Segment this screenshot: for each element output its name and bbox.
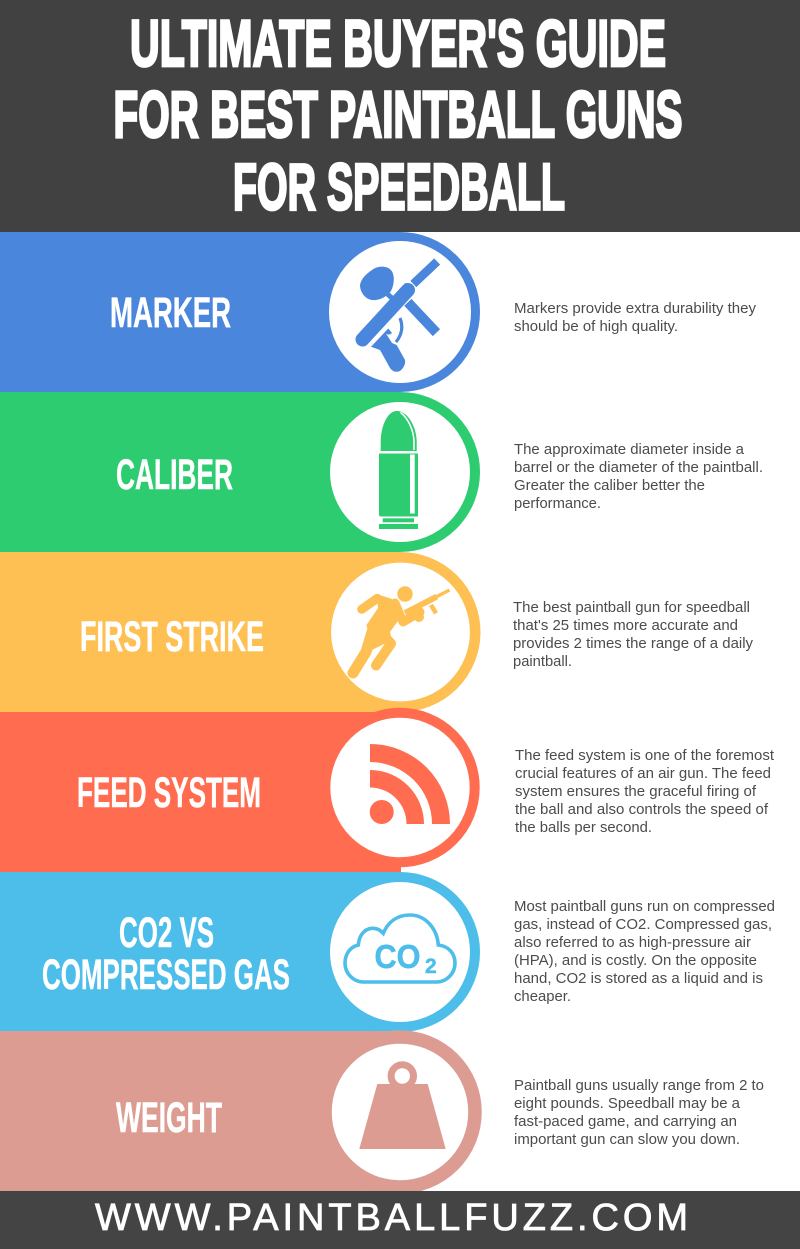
marker description xyxy=(514,301,757,335)
icon: paintball marker xyxy=(360,264,434,372)
first strike description: The best paintball gun for speedball xyxy=(513,600,750,616)
caliber description: Greater the caliber better the xyxy=(514,478,705,494)
icon: weight xyxy=(359,1065,446,1149)
CO2 description: gas, instead of CO2. Compressed gas, xyxy=(514,917,772,933)
caliber heading: CALIBER xyxy=(116,452,233,499)
first strike description xyxy=(513,600,754,670)
first strike colour bar xyxy=(0,552,400,712)
CO2 heading xyxy=(42,910,290,999)
marker heading: MARKER xyxy=(110,290,231,337)
weight description: fast-paced game, and carrying an xyxy=(514,1114,737,1130)
first strike icon ring xyxy=(326,557,475,707)
title xyxy=(114,6,682,224)
weight heading: WEIGHT xyxy=(116,1095,222,1142)
caliber description: The approximate diameter inside a xyxy=(514,442,745,458)
feed system description: crucial features of an air gun. The feed xyxy=(515,766,771,782)
panel: caliber xyxy=(0,392,763,552)
panel: marker xyxy=(0,232,757,392)
weight description: Paintball guns usually range from 2 to xyxy=(514,1078,764,1094)
first strike description: that's 25 times more accurate and xyxy=(513,618,738,634)
feed system description: the ball and also controls the speed of xyxy=(515,802,769,818)
feed system description: system ensures the graceful firing of xyxy=(515,784,757,800)
feed system heading: FEED SYSTEM xyxy=(77,770,261,817)
feed system icon ring xyxy=(325,713,475,862)
caliber description: barrel or the diameter of the paintball. xyxy=(514,460,763,476)
panel: feed system xyxy=(0,712,774,872)
CO2 description: Most paintball guns run on compressed xyxy=(514,899,775,915)
weight description: eight pounds. Speedball may be a xyxy=(514,1096,741,1112)
footer website address: WWW.PAINTBALLFUZZ.COM xyxy=(95,1197,688,1239)
icon: running paintball player xyxy=(353,586,450,673)
panel: CO2 vs compressed gas xyxy=(0,872,775,1031)
feed system description xyxy=(515,748,774,836)
CO2 description: (HPA), and is costly. On the opposite xyxy=(514,953,757,969)
title background xyxy=(0,0,800,232)
caliber description xyxy=(514,442,763,512)
CO2 heading: COMPRESSED GAS xyxy=(42,952,290,999)
marker description: should be of high quality. xyxy=(514,319,678,335)
feed system colour bar xyxy=(0,712,401,872)
weight colour bar xyxy=(0,1031,400,1191)
feed system description: The feed system is one of the foremost xyxy=(515,748,774,764)
panel: weight xyxy=(0,1031,764,1191)
title banner xyxy=(0,0,800,232)
caliber description: performance. xyxy=(514,496,601,512)
marker colour bar xyxy=(0,232,400,392)
marker icon ring xyxy=(324,236,476,388)
icon: feed signal xyxy=(370,744,450,824)
CO2 description: also referred to as high-pressure air xyxy=(514,935,751,951)
panel: first strike xyxy=(0,552,754,712)
CO2 description: cheaper. xyxy=(514,989,571,1005)
icon: CO2 cloud: 2 xyxy=(425,955,437,978)
CO2 description xyxy=(514,899,775,1005)
icon: CO2 cloud: CO xyxy=(374,938,420,975)
weight icon ring xyxy=(325,1037,475,1187)
footer background xyxy=(0,1191,800,1249)
first strike heading: FIRST STRIKE xyxy=(80,614,264,661)
CO2 colour bar xyxy=(0,872,400,1031)
weight description xyxy=(514,1078,764,1148)
first strike description: provides 2 times the range of a daily xyxy=(513,636,754,652)
title: FOR SPEEDBALL xyxy=(233,150,565,224)
marker description: Markers provide extra durability they xyxy=(514,301,757,317)
CO2 description: hand, CO2 is stored as a liquid and is xyxy=(514,971,763,987)
CO2 icon ring xyxy=(325,877,475,1027)
footer xyxy=(0,1191,800,1249)
weight description: important gun can slow you down. xyxy=(514,1132,740,1148)
icon: CO2 cloud xyxy=(345,915,455,982)
caliber icon ring xyxy=(325,397,475,547)
caliber colour bar xyxy=(0,392,400,552)
first strike description: paintball. xyxy=(513,654,572,670)
CO2 heading: CO2 VS xyxy=(119,910,214,957)
feed system description: the balls per second. xyxy=(515,820,652,836)
icon: bullet xyxy=(379,411,418,529)
